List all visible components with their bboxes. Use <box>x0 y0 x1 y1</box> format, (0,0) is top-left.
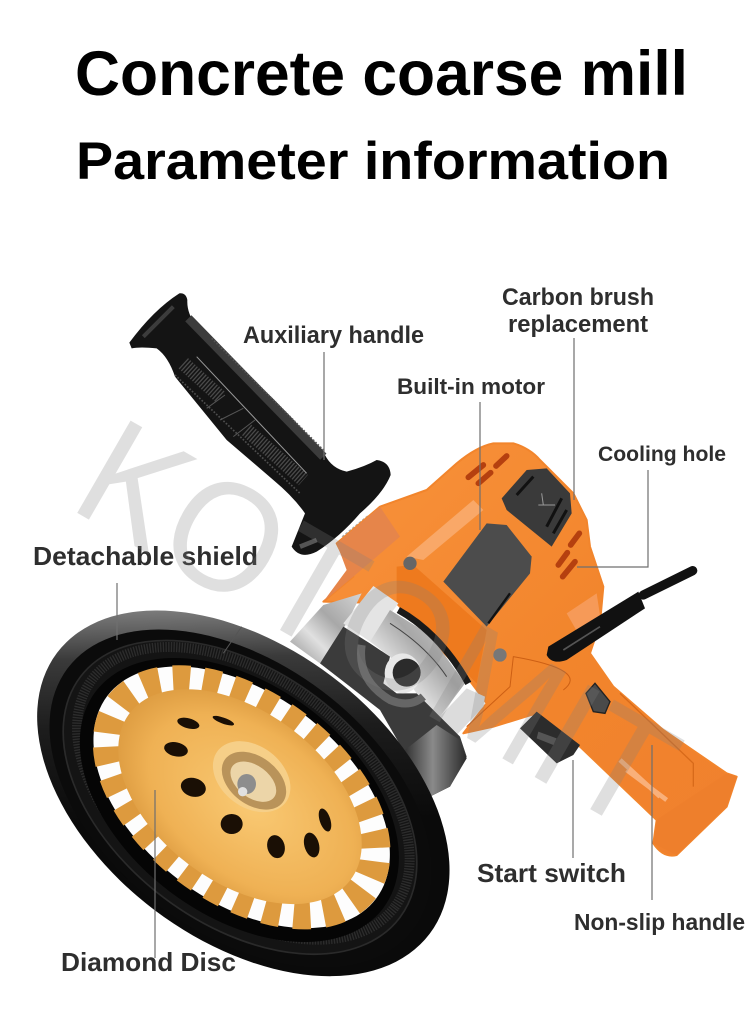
screws <box>403 557 417 570</box>
grinder body <box>323 443 737 856</box>
cooling vents <box>468 456 579 577</box>
label: start switch: Start switch <box>477 858 626 888</box>
silver collar <box>343 586 398 642</box>
power cord <box>547 571 693 662</box>
watermark: KOTOMIT <box>50 386 704 863</box>
diamond disc <box>45 613 438 981</box>
brush skirt <box>23 588 464 999</box>
label: carbon brush replacement: replacement <box>508 311 648 338</box>
detachable shield <box>0 536 518 1031</box>
housing shading <box>323 507 400 602</box>
label: cooling hole: Cooling hole <box>598 443 726 466</box>
grip button <box>586 683 610 713</box>
label: carbon brush replacement: Carbon brush <box>502 284 654 311</box>
leader lines <box>117 338 652 958</box>
silver right bar <box>440 688 485 735</box>
title: Parameter information <box>76 132 670 191</box>
label: carbon brush replacement <box>502 284 654 338</box>
label: built-in motor: Built-in motor <box>397 374 545 399</box>
silver cylinder <box>290 593 362 663</box>
title: Concrete coarse mill <box>75 39 688 109</box>
start switch <box>520 712 580 763</box>
label: diamond disc: Diamond Disc <box>61 947 236 977</box>
display panel <box>443 523 532 627</box>
pivot hole <box>385 653 421 693</box>
label: non-slip handle: Non-slip handle <box>574 909 745 935</box>
brush cover plate <box>502 468 572 547</box>
dark block <box>320 627 467 797</box>
orange housing <box>323 443 737 856</box>
gearbox <box>290 586 485 797</box>
auxiliary handle <box>129 293 391 555</box>
label: auxiliary handle: Auxiliary handle <box>243 322 424 349</box>
disc hub and bolt <box>199 726 304 827</box>
title <box>75 39 688 191</box>
disc holes <box>163 714 334 860</box>
silver main <box>370 610 465 717</box>
label: detachable shield: Detachable shield <box>33 541 258 571</box>
lower cylinder <box>405 725 467 797</box>
